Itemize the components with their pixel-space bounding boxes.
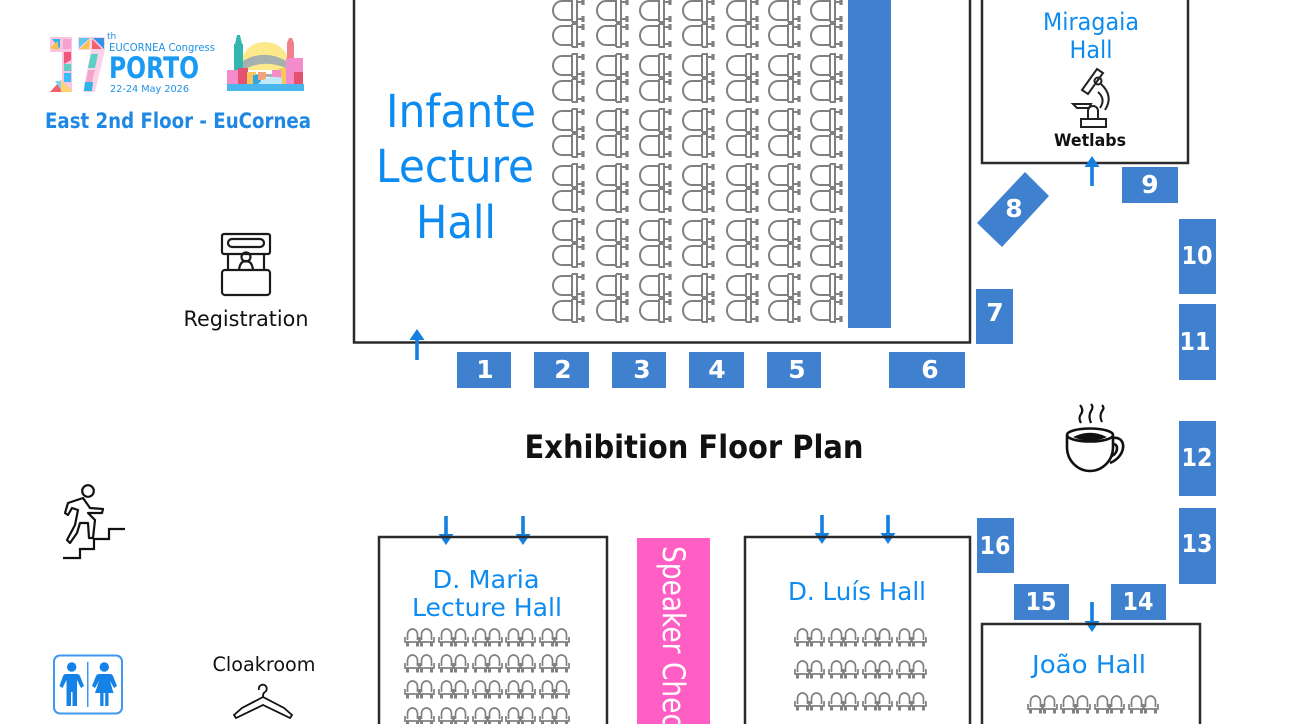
heading: Exhibition Floor Plan: Exhibition Floor Plan (524, 428, 864, 466)
stand 13 (1179, 508, 1216, 584)
stand 14 (1111, 584, 1166, 620)
arrow: Joao entrance (1084, 602, 1100, 632)
stand 8 (977, 172, 1049, 247)
panel: Infante Lecture Hall (354, 0, 970, 342)
logo city illustration (227, 35, 304, 91)
icon: hanger (234, 685, 292, 718)
panel: Miragaia Hall (982, 0, 1188, 163)
stand 5: 5 (788, 355, 806, 384)
arrow: D. Maria entrance 1 (438, 516, 454, 545)
stand 9 (1122, 167, 1178, 203)
stand 5 (767, 352, 821, 388)
stand 12 (1179, 421, 1216, 496)
room name: D. Luís Hall (788, 577, 926, 606)
room name: D. Maria (432, 565, 540, 594)
panel: João Hall (982, 624, 1200, 724)
exhibition stands (457, 167, 1216, 620)
stand 10: 10 (1182, 241, 1212, 270)
stand 7 (976, 289, 1013, 344)
icon: stairs with person (63, 485, 125, 558)
stand 14: 14 (1122, 587, 1154, 616)
stand 11 (1179, 304, 1216, 380)
seating block (1028, 696, 1158, 714)
cloakroom label: Cloakroom (212, 653, 316, 676)
room name: Hall (416, 196, 496, 249)
stage (848, 0, 891, 328)
room outline (354, 0, 970, 342)
logo text: EUCORNEA Congress (109, 42, 215, 54)
stand 13: 13 (1182, 529, 1212, 558)
wetlabs label: Wetlabs (1054, 131, 1126, 151)
panel: D. Luis Hall (745, 537, 970, 724)
room name (1043, 8, 1139, 64)
arrow: D. Maria entrance 2 (516, 516, 530, 545)
arrow: Miragaia entrance (1084, 156, 1100, 186)
arrow: D. Luis entrance 2 (880, 515, 896, 544)
stand 15 (1014, 584, 1069, 620)
room outline (982, 0, 1188, 163)
seating block (405, 629, 569, 724)
stand 9: 9 (1141, 170, 1159, 199)
stand 16: 16 (980, 531, 1010, 560)
stand 11: 11 (1180, 327, 1210, 356)
stand 3 (612, 352, 666, 388)
seating block (553, 0, 841, 322)
stand 2: 2 (554, 355, 572, 384)
room name: Lecture (376, 140, 534, 193)
stand 7: 7 (986, 298, 1004, 327)
room name: Hall (1070, 36, 1112, 64)
arrow: D. Luis entrance 1 (814, 515, 830, 544)
panel: Speaker Check-in (637, 538, 710, 724)
panel: D. Maria Lecture Hall (379, 537, 607, 724)
stand 4 (689, 352, 744, 388)
arrow: Infante entrance (410, 329, 424, 360)
room name: Lecture Hall (412, 593, 562, 622)
stand 15: 15 (1026, 587, 1056, 616)
logo numerals: 17 (50, 37, 105, 92)
logo text: th (107, 32, 116, 42)
logo text: PORTO (109, 51, 199, 85)
congress logo (50, 32, 304, 95)
female figure (92, 662, 117, 706)
stand 6 (889, 352, 965, 388)
logo text: 22-24 May 2026 (110, 84, 189, 95)
icon: microscope (1073, 69, 1109, 127)
stand 4: 4 (708, 355, 726, 384)
seating block (795, 629, 926, 710)
room name: Infante (386, 85, 536, 138)
stand 16 (977, 518, 1014, 573)
logo text (107, 32, 215, 95)
icon: coffee cup (1067, 404, 1123, 471)
male figure (60, 662, 84, 706)
icon: restrooms (54, 656, 122, 714)
registration label: Registration (184, 307, 308, 331)
room outline (982, 624, 1200, 724)
stand 1 (457, 352, 511, 388)
room name (412, 565, 562, 622)
room name: João Hall (1030, 650, 1146, 679)
room name (376, 85, 536, 249)
stand 3: 3 (633, 355, 651, 384)
stand 12: 12 (1182, 443, 1212, 472)
icon: registration booth (222, 234, 270, 295)
stand 6: 6 (921, 355, 939, 384)
stand 2 (534, 352, 589, 388)
stand 10 (1179, 219, 1216, 294)
stand 8: 8 (1005, 194, 1023, 223)
room outline (745, 537, 970, 724)
room name: Miragaia (1043, 8, 1139, 36)
stand 1: 1 (476, 355, 494, 384)
room outline (379, 537, 607, 724)
floor subtitle: East 2nd Floor - EuCornea (45, 109, 311, 133)
